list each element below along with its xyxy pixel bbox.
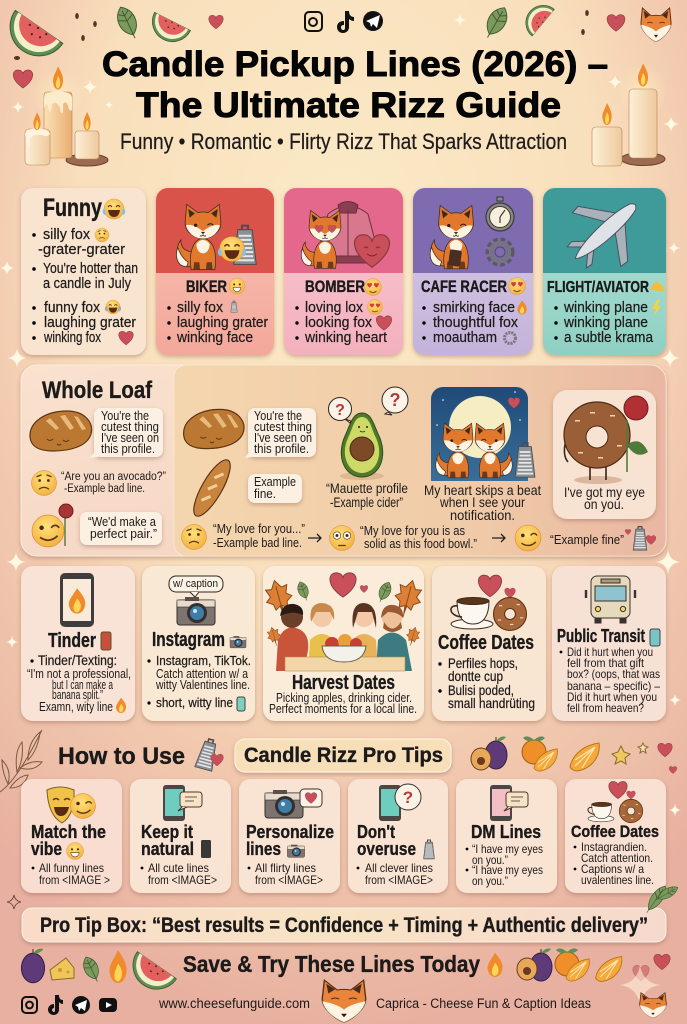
icon: phone [101,632,111,650]
panel: coffee dates [432,566,546,721]
speech bubble: this profile. [101,442,155,456]
body: “I have my eyes [472,863,543,877]
icon: heart small [669,766,677,774]
body: from <IMAGE> [365,873,433,887]
icon: cheese [650,281,664,292]
moonlit foxes illustration [431,387,535,481]
body: banana – specific) – [567,679,660,693]
icon: plum [485,736,507,769]
icon: tiktok [48,995,63,1015]
icon: leaf [80,954,103,984]
caption bubble [169,576,223,597]
body: All clever lines [365,861,433,875]
panel: funny [21,188,146,355]
flow: solid line [330,524,477,551]
list: looking fox [305,315,373,331]
speech bubble: Example [254,474,296,489]
fox holding phone [430,205,473,269]
icon: heart [209,15,223,29]
list: winking fox [43,330,102,346]
icon: grater [234,226,256,264]
speech bubble: “We'd make a [88,514,157,529]
body [147,653,251,711]
arrow [492,534,505,542]
icon: heart [654,954,670,970]
icon: watermelon seeds [14,10,589,60]
heading pill: pro tips [235,739,451,772]
heading: CAFE RACER [421,277,507,296]
panel: coffee dates tip [565,779,666,893]
icon: leaf left [113,4,143,42]
speech bubble [248,474,302,503]
caption: when I see your [439,494,525,510]
list: laughing grater [44,315,136,331]
speech bubble: I've seen on [101,431,159,445]
heading pill: pro tips: Candle Rizz Pro Tips [244,744,443,767]
body [141,861,217,887]
icon: small watermelon right [525,4,555,38]
icon: stopwatch [486,197,514,231]
heading: Public Transit [557,626,645,646]
table [285,657,405,671]
fruit bowl [322,634,366,662]
arrow [308,534,321,542]
body: small handrüting [448,695,535,711]
website: www.cheesefunguide.com [158,996,310,1011]
heading: Instagram [152,629,225,651]
caption bubble: w/ caption [172,578,218,590]
body: short, witty line [156,695,233,710]
icon: phone with question: ? [403,788,413,807]
heading: BOMBER [305,277,365,296]
body: Catch attention. [581,851,653,865]
list [554,300,661,346]
candles left [25,66,108,166]
fruit decorations [471,736,677,774]
icon: small heart [505,588,515,598]
icon: plum half [517,958,537,980]
body: Perfiles hops, [448,655,518,671]
heading: Personalize [246,822,334,842]
icon: smile [229,278,245,294]
candles right [592,63,669,166]
list: moautham [433,330,497,346]
icon: instagram [22,997,37,1013]
icon: cheese [50,958,74,980]
body [357,861,433,887]
body: “I have my eyes [472,842,543,856]
panel: don't overuse: overuse [357,839,416,859]
body: Examn, wity line [39,700,113,714]
body: Picking apples, drinking cider. [276,691,412,705]
heading: Don't [357,822,395,842]
icon: worried emoji [32,470,56,496]
body: All cute lines [148,861,209,875]
panel: donut card: on you. [584,496,624,512]
illustration: friends at table [262,573,425,671]
speech bubble [90,408,163,458]
speech bubble: perfect pair.” [90,526,157,541]
heading: Harvest Dates [292,672,395,694]
decoration: branch left [0,730,42,792]
save row icons left [21,949,176,989]
body [560,645,660,715]
panel: public transit [552,566,666,721]
icon: coffee cup [451,598,493,629]
icon: bomber jacket [318,202,378,263]
icon: airplane [551,177,660,286]
body: fell from heaven? [567,701,644,715]
heading: Coffee Dates [438,632,534,654]
sparkle [620,965,660,1005]
icon: bread right [184,409,244,449]
body [438,655,535,711]
icon: phone with flame [60,573,94,627]
icon: fire [109,950,127,983]
question bubble [328,398,352,423]
person 2 [308,603,336,671]
list [422,300,527,346]
body: Tinder/Texting: [38,653,117,668]
icon: short right candle [75,112,99,159]
body: Perfect moments for a local line. [269,702,417,716]
icon: large watermelon [10,10,63,56]
icon: orange slice [570,743,599,771]
panel: don't overuse [348,779,448,893]
heading: Keep it [141,822,193,842]
body: “I'm not a professional, [27,667,131,681]
panel: biker [156,188,274,355]
body: Catch attention w/ a [156,667,248,681]
icon: avocado [340,413,384,480]
body: witty Valentines line. [155,678,250,692]
body: uvalentines line. [581,873,654,887]
title: Candle Pickup Lines (2026) – [102,45,608,84]
question bubble: ? [390,390,400,410]
body [27,653,131,714]
icon: phone [650,629,660,646]
icon: instagram [305,12,322,31]
heading: Coffee Dates [571,823,659,841]
icon: heart [478,575,502,597]
icon: small star [638,743,648,753]
body: banana split.” [52,688,103,702]
list: funny fox [44,300,101,316]
icon: emoji [66,842,84,860]
body: from <IMAGE> [255,873,323,887]
body: on you.” [472,874,508,888]
speech bubble: You're the [101,409,149,423]
speech bubble: this profile. [254,442,309,456]
list: silly fox [43,227,91,243]
heading: how to use: How to Use [58,743,185,770]
icon: donut [494,598,526,630]
list: winking plane [563,300,648,316]
panel: bomber [284,188,403,355]
fox winking [176,204,221,270]
panel: keep it natural [130,779,231,893]
glow [32,69,84,121]
body: Instagram, TikTok. [156,653,251,668]
bad line: “Are you an avocado?” [61,471,166,483]
icon: orange [522,736,546,764]
glow [617,64,669,116]
icon: tall candle [44,66,72,158]
list: a subtle krama [564,330,654,346]
caption: notification. [450,507,515,523]
body: All flirty lines [255,861,316,875]
icon: heart-eyes face [508,278,526,294]
icon: smiling heart [355,235,389,267]
icon: phone [201,840,211,858]
question bubble: ? [335,402,345,419]
question bubble [382,387,408,415]
icon: gear [489,241,511,263]
panel: flight aviator [543,177,666,355]
icon: fox logo [322,980,366,1022]
speech bubble: cutest thing [254,420,312,434]
icon: phone with bubble [490,785,528,821]
panel: tinder [21,566,135,721]
caption: My heart skips a beat [424,482,541,498]
icon: camera [177,597,215,625]
flow: solid line: solid as this food bowl.” [364,537,477,551]
body [248,861,323,887]
list: -grater-grater [38,242,125,258]
body: Bulisi poded, [448,682,514,698]
caption: -Example cider” [330,495,403,510]
caption: “Mauette profile [326,481,408,496]
icon: short left candle [25,112,50,165]
body [574,840,654,887]
icon: star [612,746,630,764]
title [102,45,608,125]
body [269,691,417,716]
flow: bad line [182,522,305,550]
icon: winking emoji with rose [32,504,73,547]
body: but I can make a [52,678,113,692]
social icons top [305,11,383,33]
list: You're hotter than [43,261,138,277]
save row icons right [488,948,670,1005]
icon: bus [586,576,635,623]
list: loving lox [305,300,364,316]
icon: coffee, donut and hearts [588,781,643,823]
body: Captions w/ a [581,862,644,876]
list [32,227,138,346]
icon: laughing emoji [218,236,246,262]
icon: leaf right [480,4,512,42]
icon: orange wedge [534,749,557,771]
icon: heart [658,743,672,757]
list: smirking face [433,300,515,316]
panel: whole loaf [21,365,666,556]
panel: match the vibe: vibe [31,839,62,859]
panel: harvest dates [262,566,425,721]
sparkles [0,14,681,816]
icon: grater and heart [195,737,223,771]
panel: dm lines [456,779,557,893]
list [167,300,268,346]
call to action: Save & Try These Lines Today [183,951,480,977]
icon: baguette [187,455,237,521]
body: fell from that gift [567,656,645,670]
pro tip box [22,908,666,942]
panel: instagram [142,566,255,721]
flow: fine line [515,525,656,551]
heart eyes [315,225,336,233]
icon: telegram [363,11,383,31]
speech bubble: I've seen on [254,431,312,445]
panel: cafe racer [413,188,533,355]
body: All funny lines [39,861,104,875]
icon: dish [66,154,108,166]
speech bubble [80,512,162,545]
icon: plum half [471,748,491,770]
icon: youtube [99,998,117,1012]
list [295,300,392,346]
icon: hearts face [364,278,382,296]
body: from <IMAGE > [39,873,110,887]
icon: fire [488,953,503,977]
person 4 [376,605,412,671]
body: Did it hurt when you [567,690,657,704]
bad line [61,471,166,495]
icon: grater [424,840,434,859]
icon: plum [21,949,45,983]
heading: Funny [43,194,102,222]
decoration: leaf sprig [642,883,680,916]
icon: bread [30,411,92,451]
list: winking heart [304,330,387,346]
heading: DM Lines [471,822,541,842]
panel: donut card [553,390,656,519]
tips row [21,779,666,893]
list: laughing grater [177,315,268,331]
body: Instagrandien. [581,840,647,854]
icon: laughing emoji [103,199,125,219]
body: box? (oops, that was [567,667,660,681]
icon: masks [47,787,96,823]
icon: bolt [652,300,661,316]
heading: BIKER [186,277,227,296]
flow: bad line: -Example bad line. [213,536,302,550]
panel: match the vibe [21,779,122,893]
flow: solid line: “My love for you is as [360,524,465,538]
speech bubble [245,408,316,458]
icon: dish [621,152,665,166]
title: The Ultimate Rizz Guide [136,86,561,125]
body [32,861,110,887]
icon: short candle [592,103,622,166]
speech bubble: cutest thing [101,420,159,434]
footer social icons [22,995,117,1015]
fox with heart eyes [301,210,341,268]
flow: bad line: “My love for you...” [213,522,305,536]
icon: small watermelon left [151,8,192,44]
heading: FLIGHT/AVIATOR [547,279,649,296]
icon: heart left [13,70,33,88]
list: thoughtful fox [433,315,519,331]
icon: telegram [72,996,90,1014]
bad line: -Example bad line. [64,483,145,495]
icon: tiktok [337,11,354,33]
list: silly fox [177,300,224,316]
icon: camera small [287,845,305,857]
heading: Whole Loaf [42,377,153,404]
list: winking plane [563,315,648,331]
icon: plum [530,948,552,981]
caption: I've got my eye [564,484,645,500]
caption [326,481,408,510]
body: Did it hurt when you [567,645,653,659]
body: dontte cup [448,668,503,684]
caption [424,482,541,523]
person 1 [276,604,308,671]
speech bubble: You're the [254,409,302,423]
icon: fox head top right [641,8,671,42]
icon: watermelon [133,952,176,989]
flow: fine line: “Example fine” [550,532,624,547]
heading: Tinder [48,630,96,652]
heading: Match the [31,822,106,842]
speech bubble: fine. [254,486,276,501]
icon: tall candle [629,63,657,158]
body [466,842,543,888]
decoration: outline sparkle [7,895,21,909]
tagline: Caprica - Cheese Fun & Caption Ideas [376,996,591,1011]
icon: fox small [640,993,666,1018]
icon: orange slice [596,956,622,982]
body: from <IMAGE> [148,873,217,887]
icon: camera small [230,636,246,648]
icon: pale heart [633,965,649,981]
panel: keep it natural: natural [141,839,194,859]
panel: personalize lines: lines [246,839,281,859]
icon: orange [555,948,579,976]
icon: heart right [607,15,625,31]
autumn leaves [262,577,425,647]
icon: phone with bubble [163,785,202,821]
body: on you.” [472,853,508,867]
subtitle: Funny • Romantic • Flirty Rizz That Sparks Attraction [120,129,567,154]
list: winking face [176,330,253,346]
icon: camera with heart [265,789,322,818]
icon: orange wedge [566,959,589,981]
person 3 [352,603,378,671]
list: a candle in July [43,276,132,292]
header decorations [0,4,681,816]
panel: personalize lines [239,779,340,893]
